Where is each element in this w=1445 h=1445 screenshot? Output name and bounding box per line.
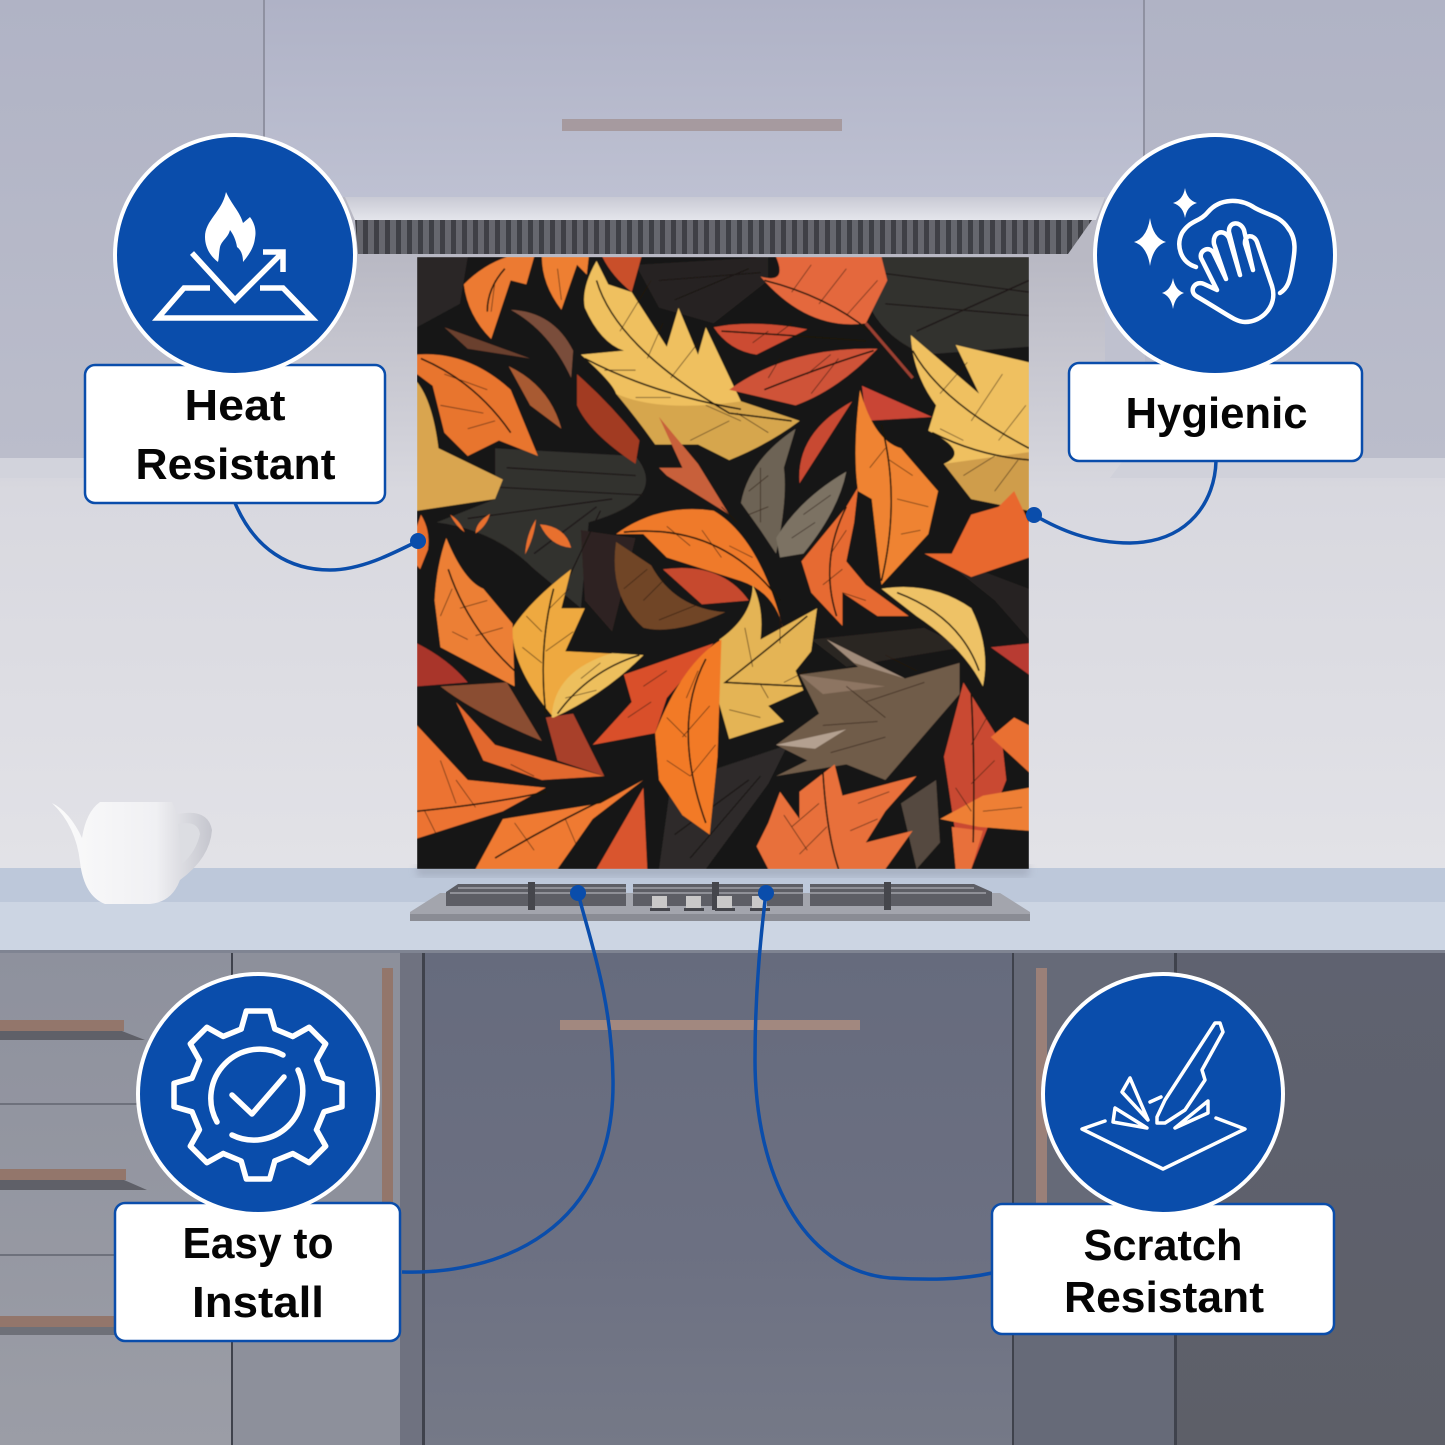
big yellow feather [581,261,799,515]
connector: scratch resistant [755,885,992,1279]
badge circle [136,972,380,1216]
leaf pattern splashback [417,257,1029,869]
icon: gear with check [174,1011,342,1179]
lower cabinets [0,953,1445,1445]
panel shadow [417,866,1029,876]
label box [1069,363,1362,461]
connector: easy to install [402,885,613,1272]
countertop [0,868,1445,953]
callout: hygienic [1069,133,1362,461]
badge circle [1093,133,1337,377]
falling petals [417,514,571,569]
left yellow leaf [417,382,503,511]
label text: Hygienic [1126,389,1308,438]
upper cabinets [0,0,1445,478]
label box [85,365,385,503]
badge circle [113,133,357,377]
cabinet handles [0,968,1047,1335]
fine side veins [425,265,1026,854]
connector: heat resistant [235,503,426,570]
label text: Scratch [1084,1221,1242,1270]
badge circle [1041,972,1285,1216]
icon: hand wiping with sparkles [1134,188,1294,322]
label text: Easy to [182,1219,334,1268]
right yellow leaf [911,335,1029,511]
callout: scratch resistant: Resistant [1064,1273,1264,1322]
label box [992,1204,1334,1334]
grey brown leaf cluster [776,639,960,869]
label text: Heat [184,381,286,430]
bottom orange leaf [757,764,917,869]
centre right orange leaves [801,390,1029,626]
label box [115,1203,400,1341]
icon: flame over reflecting surface [158,192,312,318]
callout: scratch resistant [992,972,1334,1334]
grey leaves [741,429,846,558]
callout: easy to install: Install [192,1278,324,1327]
range hood [345,197,1105,254]
teapot [52,802,212,904]
upper right red leaves [714,257,932,483]
connector: hygienic [1026,461,1216,543]
callout: heat resistant: Resistant [136,440,336,489]
bottom left leaves [417,538,647,869]
leaf veins [417,269,1029,869]
callout: easy to install [115,972,400,1341]
centre orange feather [615,509,784,632]
top left orange leaves [417,257,641,464]
centre yellow and orange leaves [593,585,817,835]
callout: heat resistant [85,133,385,503]
gas cooktop [410,882,1030,921]
right side leaves [881,587,1029,869]
icon: knife scratching surface [1082,1023,1245,1169]
dark leaf streaks [468,269,1029,858]
dark background leaves [417,257,1029,869]
